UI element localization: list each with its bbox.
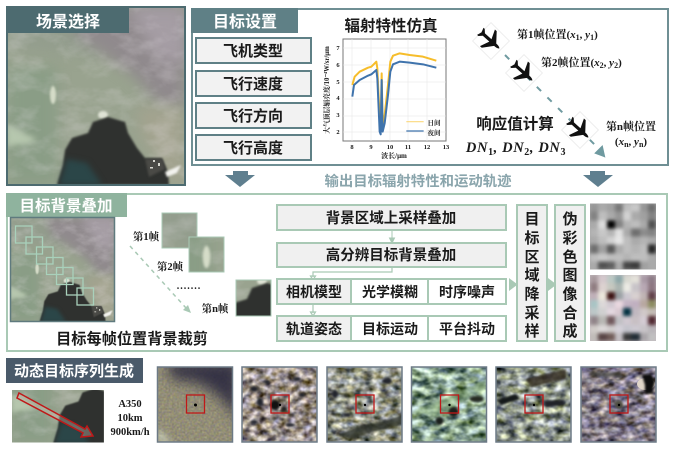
line chart: radiance vs wavelength: 大气顶层辐亮度/10⁻⁴W/sr/μm <box>322 46 331 134</box>
target parameters <box>110 399 150 438</box>
line chart: radiance vs wavelength: 4 <box>336 95 340 102</box>
box: pseudo colour composition: 色 <box>562 248 578 266</box>
flight trajectory dashed arrow <box>505 55 604 156</box>
box: optical blur <box>351 279 428 304</box>
label: frame 1 position: , <box>580 29 585 41</box>
crop: frame 1 <box>162 212 198 248</box>
label: frame 2 position: ) <box>618 57 622 69</box>
option: flight direction <box>196 103 311 128</box>
formula: DN values: 2 <box>524 147 530 158</box>
line chart: radiance vs wavelength: 6 <box>336 62 340 69</box>
label: frame 1 position: 1 <box>590 33 594 42</box>
icon: aircraft frame 2 <box>506 55 542 91</box>
line chart: radiance vs wavelength: 10 <box>387 144 393 151</box>
crop: frame 2 <box>188 236 224 272</box>
box: target area downsampling: 降 <box>524 286 540 303</box>
option: flight altitude: 飞行高度 <box>223 139 283 157</box>
target parameters: A350 <box>118 399 142 410</box>
line chart: radiance vs wavelength: 2 <box>336 129 340 136</box>
box: temporal noise: 时序噪声 <box>439 284 495 300</box>
thumbnail frame 4 <box>412 367 486 442</box>
formula: DN values: 1 <box>488 147 494 158</box>
box: target area downsampling: 标 <box>524 230 540 247</box>
line chart: radiance vs wavelength: 13 <box>443 144 450 151</box>
label: frame n position: ) <box>643 136 647 148</box>
box: pseudo colour composition: 伪 <box>562 211 578 228</box>
label: frame 1 position: y <box>583 29 590 41</box>
heading: target settings: 目标设置 <box>213 13 277 31</box>
label: frame n position: n <box>624 140 629 149</box>
line chart: radiance vs wavelength: 日间 <box>428 118 441 127</box>
box: optical blur: 光学模糊 <box>362 284 418 300</box>
box: background upsampling <box>277 205 506 230</box>
thumbnail frame 2 <box>242 367 317 442</box>
heading: radiation simulation: 辐射特性仿真 <box>344 16 438 35</box>
line chart: radiance vs wavelength <box>322 39 450 160</box>
line chart: radiance vs wavelength: 5 <box>336 79 340 86</box>
box: pseudo colour composition: 像 <box>562 285 578 303</box>
box: target area downsampling <box>517 205 547 341</box>
box: platform jitter: 平台抖动 <box>439 321 495 337</box>
satellite scene image <box>7 7 185 185</box>
target parameters: 900km/h <box>110 427 150 438</box>
formula: DN values: 3 <box>560 147 566 158</box>
arrow: output left <box>225 171 255 187</box>
arrow: to pseudo colour <box>549 280 555 289</box>
box: pseudo colour composition: 合 <box>562 304 578 322</box>
option: flight altitude <box>196 135 311 160</box>
heading: target background overlay: 目标背景叠加 <box>19 196 113 215</box>
connector down <box>310 304 316 316</box>
box: target motion: 目标运动 <box>362 321 418 337</box>
label: frame n position: , <box>629 136 634 148</box>
box: temporal noise <box>428 279 506 304</box>
arrow: output right <box>583 171 613 187</box>
label: frame 2 position: , <box>604 57 609 69</box>
label: frame 1: 第1帧 <box>133 230 160 243</box>
crop: frame n <box>236 280 272 316</box>
panel: scene selection <box>7 7 185 185</box>
option: aircraft type <box>196 38 311 63</box>
box: target area downsampling: 域 <box>524 267 540 284</box>
target parameters: 10km <box>117 413 143 424</box>
line chart: radiance vs wavelength: 夜间 <box>428 128 441 137</box>
image: grayscale result <box>590 204 656 270</box>
label: frame 2 position: 2 <box>614 61 618 70</box>
panel: target background overlay <box>6 193 668 352</box>
scene with flight path arrow <box>12 390 104 442</box>
box: platform jitter <box>428 316 506 341</box>
box: pseudo colour composition: 彩 <box>562 230 578 247</box>
formula: DN values: DN <box>466 140 488 156</box>
label: frame 1 position: 第1帧位置(x <box>517 29 576 41</box>
formula: DN values: , DN <box>529 140 560 156</box>
option: flight direction: 飞行方向 <box>223 107 283 125</box>
box: target area downsampling: 样 <box>524 322 540 340</box>
thumbnail frame 3 <box>327 367 402 442</box>
option: aircraft type: 飞机类型 <box>223 43 283 60</box>
thumbnail frame 6 <box>581 367 656 442</box>
line chart: radiance vs wavelength: 波长/μm <box>381 151 407 160</box>
label: frame n position: y <box>632 136 639 148</box>
caption: per-frame background cropping: 目标每帧位置背景裁剪 <box>56 330 208 348</box>
line chart: radiance vs wavelength: 3 <box>336 112 340 119</box>
label: frame 1 position: ) <box>594 29 598 41</box>
label: frame 2 position: 2 <box>600 61 604 70</box>
box: high resolution overlay: 高分辨目标背景叠加 <box>326 246 456 264</box>
formula: DN values: , DN <box>493 140 524 156</box>
ellipsis dots: ....... <box>177 281 201 292</box>
scene with crop boxes <box>10 217 115 322</box>
option: flight speed: 飞行速度 <box>223 75 283 93</box>
label: frame 2 position: 第2帧位置(x <box>541 57 600 69</box>
box: target area downsampling: 采 <box>524 305 540 322</box>
label: frame n: 第n帧 <box>202 302 229 315</box>
box: orbit attitude: 轨道姿态 <box>286 321 342 337</box>
image: pseudo colour result <box>590 275 656 341</box>
heading: scene selection: 场景选择 <box>36 13 100 31</box>
dashed arrow between frames <box>130 246 191 313</box>
box: target area downsampling: 目 <box>524 211 540 228</box>
heading: target settings <box>191 8 298 33</box>
box: high resolution overlay <box>277 243 506 267</box>
label: frame n position: 第n帧位置 <box>606 119 656 133</box>
label: frame n position <box>606 119 656 149</box>
label: frame 2: 第2帧 <box>157 260 184 273</box>
arrow: to downsampling <box>510 280 516 289</box>
label: frame 2 position: y <box>607 57 614 69</box>
label: frame n position: (x <box>615 136 624 148</box>
box: pseudo colour composition: 图 <box>562 267 578 284</box>
box: orbit attitude <box>277 316 351 341</box>
box: target motion <box>351 316 428 341</box>
line chart: radiance vs wavelength: 9 <box>369 144 373 151</box>
heading: target background overlay <box>6 193 127 217</box>
heading: dynamic target sequence generation: 动态目标序列生成 <box>14 362 134 380</box>
icon: aircraft frame 1 <box>473 23 509 59</box>
line chart: radiance vs wavelength: 12 <box>424 144 430 151</box>
heading: response calculation: 响应值计算 <box>476 114 554 133</box>
connector to camera model <box>310 267 392 280</box>
box: pseudo colour composition <box>555 205 585 341</box>
heading: dynamic target sequence generation <box>6 358 143 383</box>
line chart: radiance vs wavelength: 8 <box>350 144 354 151</box>
line chart: radiance vs wavelength: 7 <box>336 45 340 52</box>
icon: aircraft frame n <box>562 112 598 148</box>
arrow: down <box>390 230 394 243</box>
panel: target settings <box>191 8 668 165</box>
line chart: radiance vs wavelength: 11 <box>405 144 411 151</box>
option: flight speed <box>196 71 311 96</box>
box: camera model: 相机模型 <box>286 284 342 300</box>
heading: scene selection <box>7 7 129 33</box>
thumbnail frame 5 <box>496 367 571 442</box>
box: background upsampling: 背景区域上采样叠加 <box>326 209 456 227</box>
box: pseudo colour composition: 成 <box>562 322 578 340</box>
box: target area downsampling: 区 <box>524 249 540 266</box>
thumbnail frame 1 <box>156 366 234 443</box>
box: camera model <box>277 279 351 304</box>
label: frame n position: n <box>639 140 644 149</box>
text: output target radiation and motion trajectory: 输出目标辐射特性和运动轨迹 <box>324 172 512 190</box>
label: frame 1 position: 1 <box>576 33 580 42</box>
